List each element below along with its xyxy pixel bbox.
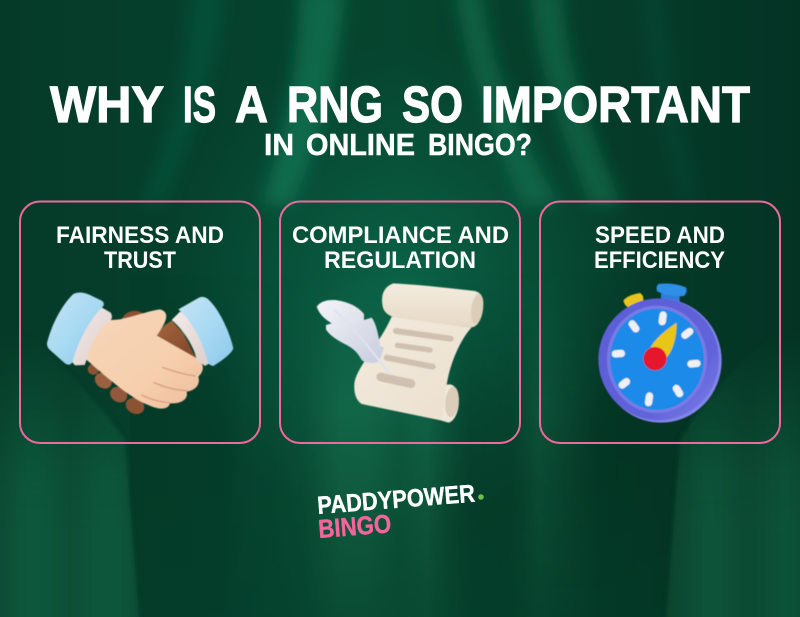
subtitle: IN [264,127,294,162]
panel: fairness and trust [20,202,260,443]
heading: speed and efficiency: SPEED AND [595,222,725,249]
heading: compliance and regulation: COMPLIANCE AND [292,222,509,249]
logo: Paddy Power Bingo: PADDYPOWER [316,480,476,520]
heading: fairness and trust [56,222,224,274]
heading: speed and efficiency: EFFICIENCY [594,247,725,274]
heading: compliance and regulation: REGULATION [324,247,476,274]
logo: Paddy Power Bingo: BINGO [317,508,392,544]
panel: speed and efficiency [540,202,780,443]
title: A [235,76,268,133]
icon: scroll and quill [317,283,485,423]
title: SO [402,76,463,133]
title: IS [183,76,216,133]
subtitle [264,127,532,162]
title: WHY [50,76,164,133]
panel: compliance and regulation [280,202,520,443]
heading: fairness and trust: FAIRNESS AND [56,222,224,249]
heading: speed and efficiency [594,222,725,274]
logo: Paddy Power Bingo [316,480,484,544]
title [50,76,750,133]
title: IMPORTANT [481,76,750,133]
subtitle: ONLINE [306,127,415,162]
icon: handshake [47,293,233,417]
icon: stopwatch [598,283,722,423]
heading: fairness and trust: TRUST [104,247,176,274]
subtitle: BINGO? [428,127,532,162]
heading: compliance and regulation [292,222,509,274]
title: RNG [287,76,383,133]
